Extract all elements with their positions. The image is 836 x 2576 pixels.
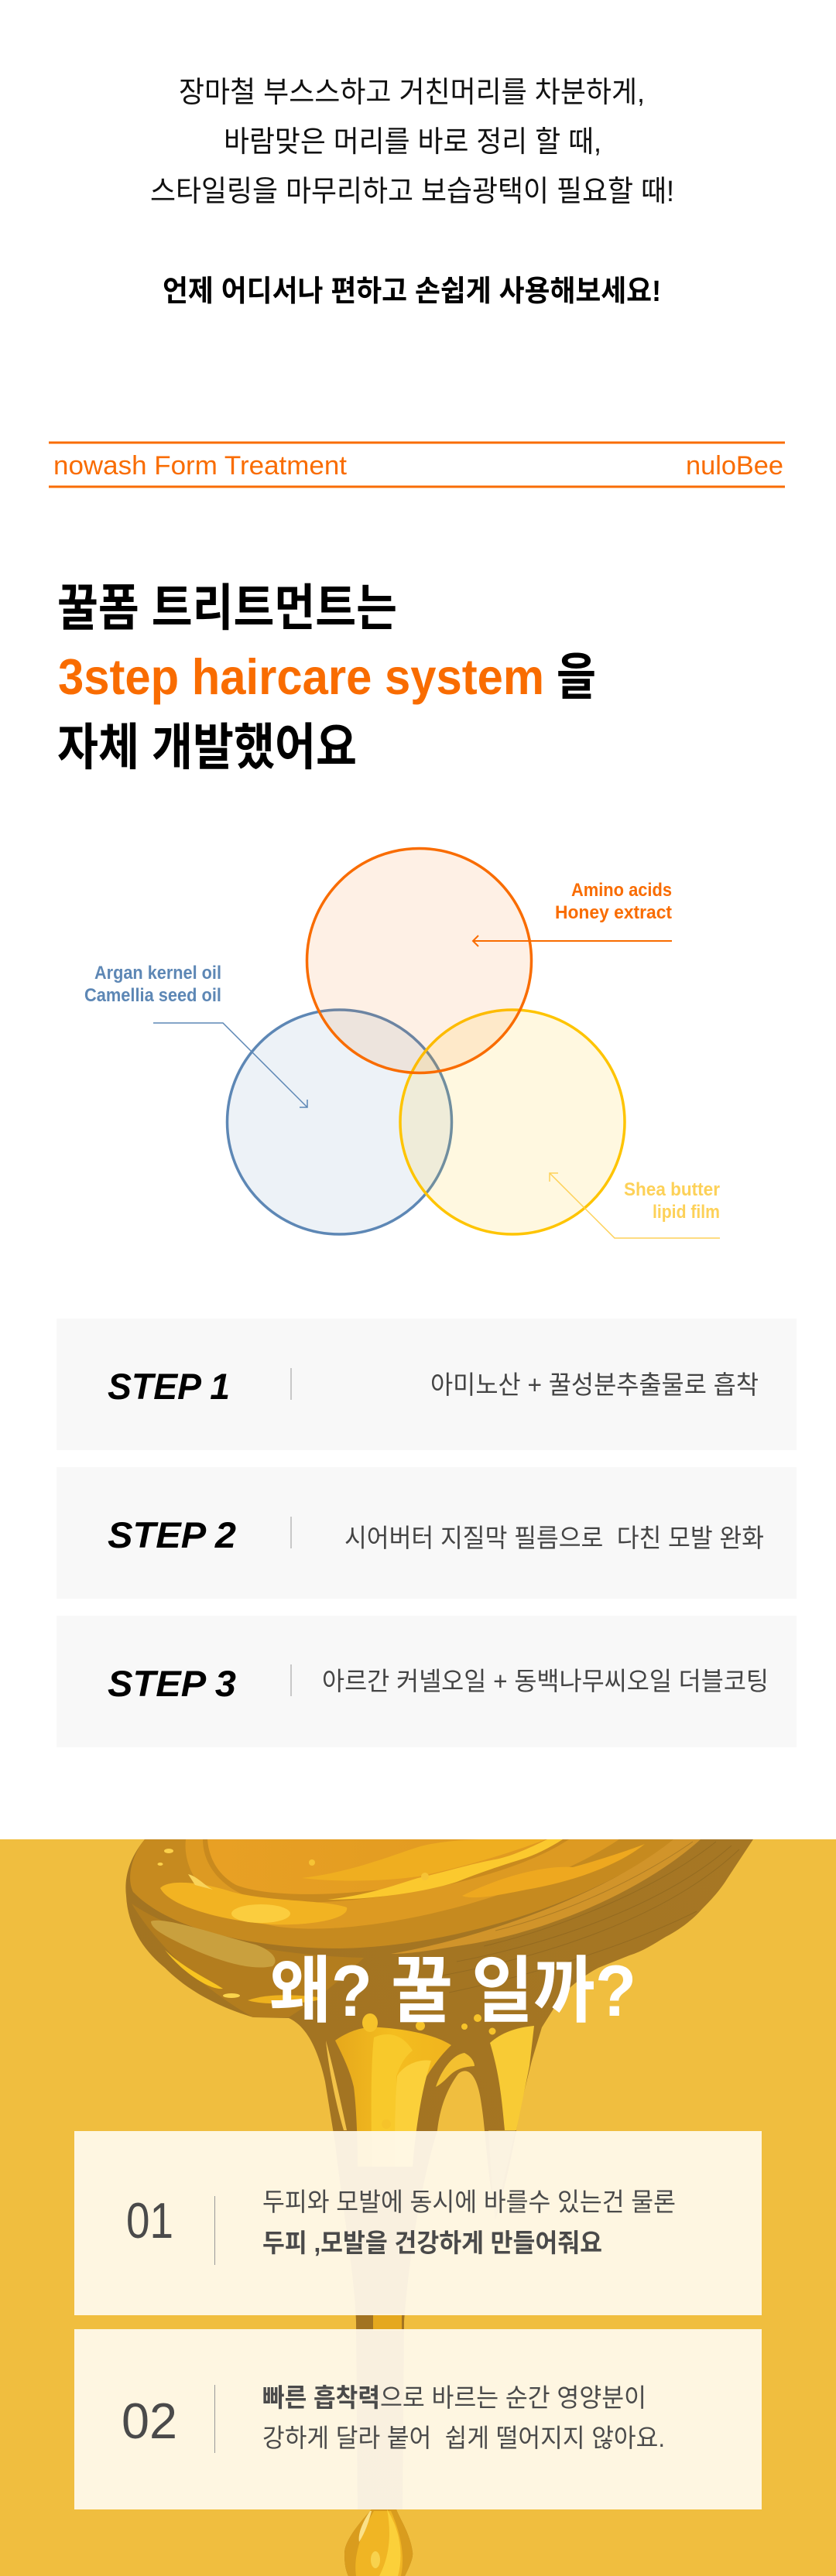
section title: 왜? 꿀 일까? <box>269 1950 636 2031</box>
label: shea butter: lipid film <box>653 1202 720 1223</box>
label: amino acids <box>555 880 672 923</box>
panel: reason 01: 두피와 모발에 동시에 바를수 있는건 물론 <box>262 2188 676 2216</box>
label: oils: Argan kernel oil <box>94 963 221 984</box>
header band: product and brand <box>49 441 785 487</box>
right stem highlight <box>490 2026 534 2130</box>
drop at bottom <box>344 2509 413 2576</box>
panel: step 2 <box>57 1467 797 1599</box>
label: shea butter <box>624 1179 720 1223</box>
header band: product and brand: nuloBee <box>686 451 783 481</box>
panel: step 2: STEP 2 <box>108 1514 236 1555</box>
circle: yellow shea butter <box>400 1010 625 1234</box>
panel: step 3: 아르간 커넬오일 + 동백나무씨오일 더블코팅 <box>322 1667 769 1695</box>
panel: reason 02: 빠른 흡착력 <box>262 2383 380 2412</box>
intro text block: 바람맞은 머리를 바로 정리 할 때, <box>224 126 601 159</box>
header band: product and brand: nowash Form Treatment <box>53 451 348 481</box>
panel: step 1: STEP 1 <box>108 1366 230 1407</box>
label: oils: Camellia seed oil <box>84 985 221 1006</box>
illustration: dripping honey <box>125 1839 753 2576</box>
panel: step 1: 아미노산 + 꿀성분추출물로 흡착 <box>430 1370 759 1399</box>
arrow: blue <box>153 1023 307 1107</box>
panel: reason 02: 02 <box>122 2393 177 2449</box>
section heading: 을 <box>557 648 596 705</box>
panel: honey section background <box>0 1839 836 2576</box>
orange band under bowl <box>186 1839 619 1928</box>
bowl inner rim <box>203 1839 569 1903</box>
circle: blue oils <box>228 1010 452 1234</box>
top glints <box>164 1849 173 1853</box>
central bright stream <box>335 2027 451 2131</box>
label: amino acids: Amino acids <box>571 880 672 901</box>
section heading <box>57 580 596 775</box>
grey reflective patch <box>151 1921 276 1968</box>
panel: reason 01: 두피 ,모발을 건강하게 만들어줘요 <box>262 2229 602 2257</box>
yellow streak <box>327 1839 563 1900</box>
panel: step 3: STEP 3 <box>108 1663 236 1704</box>
arch highlight <box>436 2053 475 2087</box>
arrow: orange <box>473 936 672 946</box>
circle: orange amino acids <box>307 848 531 1072</box>
honey silhouette <box>125 1839 753 2576</box>
section heading: 자체 개발했어요 <box>57 719 357 775</box>
stream between cards <box>373 2314 402 2331</box>
intro text block: 장마철 부스스하고 거친머리를 차분하게, <box>179 77 645 109</box>
drip inside right stem <box>488 2130 516 2131</box>
intro bold callout: 언제 어디서나 편하고 손쉽게 사용해보세요! <box>163 275 661 308</box>
label: shea butter: Shea butter <box>624 1179 720 1200</box>
central highlight <box>395 2060 431 2131</box>
venn diagram of ingredients <box>84 848 720 1238</box>
panel: step 3 <box>57 1616 797 1747</box>
swirl mid band <box>130 1839 675 1948</box>
orange lens <box>462 1844 645 1897</box>
label: oils <box>84 963 221 1006</box>
label: amino acids: Honey extract <box>555 902 672 923</box>
panel: step 2: 시어버터 지질막 필름으로 다친 모발 완화 <box>344 1524 764 1552</box>
panel: reason 02: 으로 바르는 순간 영양분이 <box>380 2383 646 2412</box>
panel: step 1 <box>57 1319 797 1450</box>
panel: reason 01: 01 <box>126 2192 173 2249</box>
intro text block <box>150 77 674 208</box>
panel: reason 01 <box>74 2131 762 2315</box>
left stem streak <box>326 2041 347 2130</box>
section heading: 꿀폼 트리트먼트는 <box>57 580 397 636</box>
panel: reason 02 <box>74 2329 762 2509</box>
gold wedge <box>302 1839 546 1881</box>
tan right band <box>391 1839 701 1954</box>
arrow: yellow <box>550 1173 720 1238</box>
left rim lower patch <box>132 1904 364 2017</box>
yellow highlight pool <box>160 1883 347 1924</box>
lower left glints <box>165 1950 223 1989</box>
grain lines <box>433 1842 739 1993</box>
central lighter pane <box>372 2034 413 2131</box>
section heading: 3step haircare system <box>58 648 544 705</box>
bowl interior <box>207 1839 555 1894</box>
bright highlight <box>231 1904 290 1923</box>
bubbles <box>362 2013 495 2129</box>
panel: reason 02: 강하게 달라 붙어 쉽게 떨어지지 않아요. <box>262 2424 665 2452</box>
intro text block: 스타일링을 마무리하고 보습광택이 필요할 때! <box>150 176 674 208</box>
